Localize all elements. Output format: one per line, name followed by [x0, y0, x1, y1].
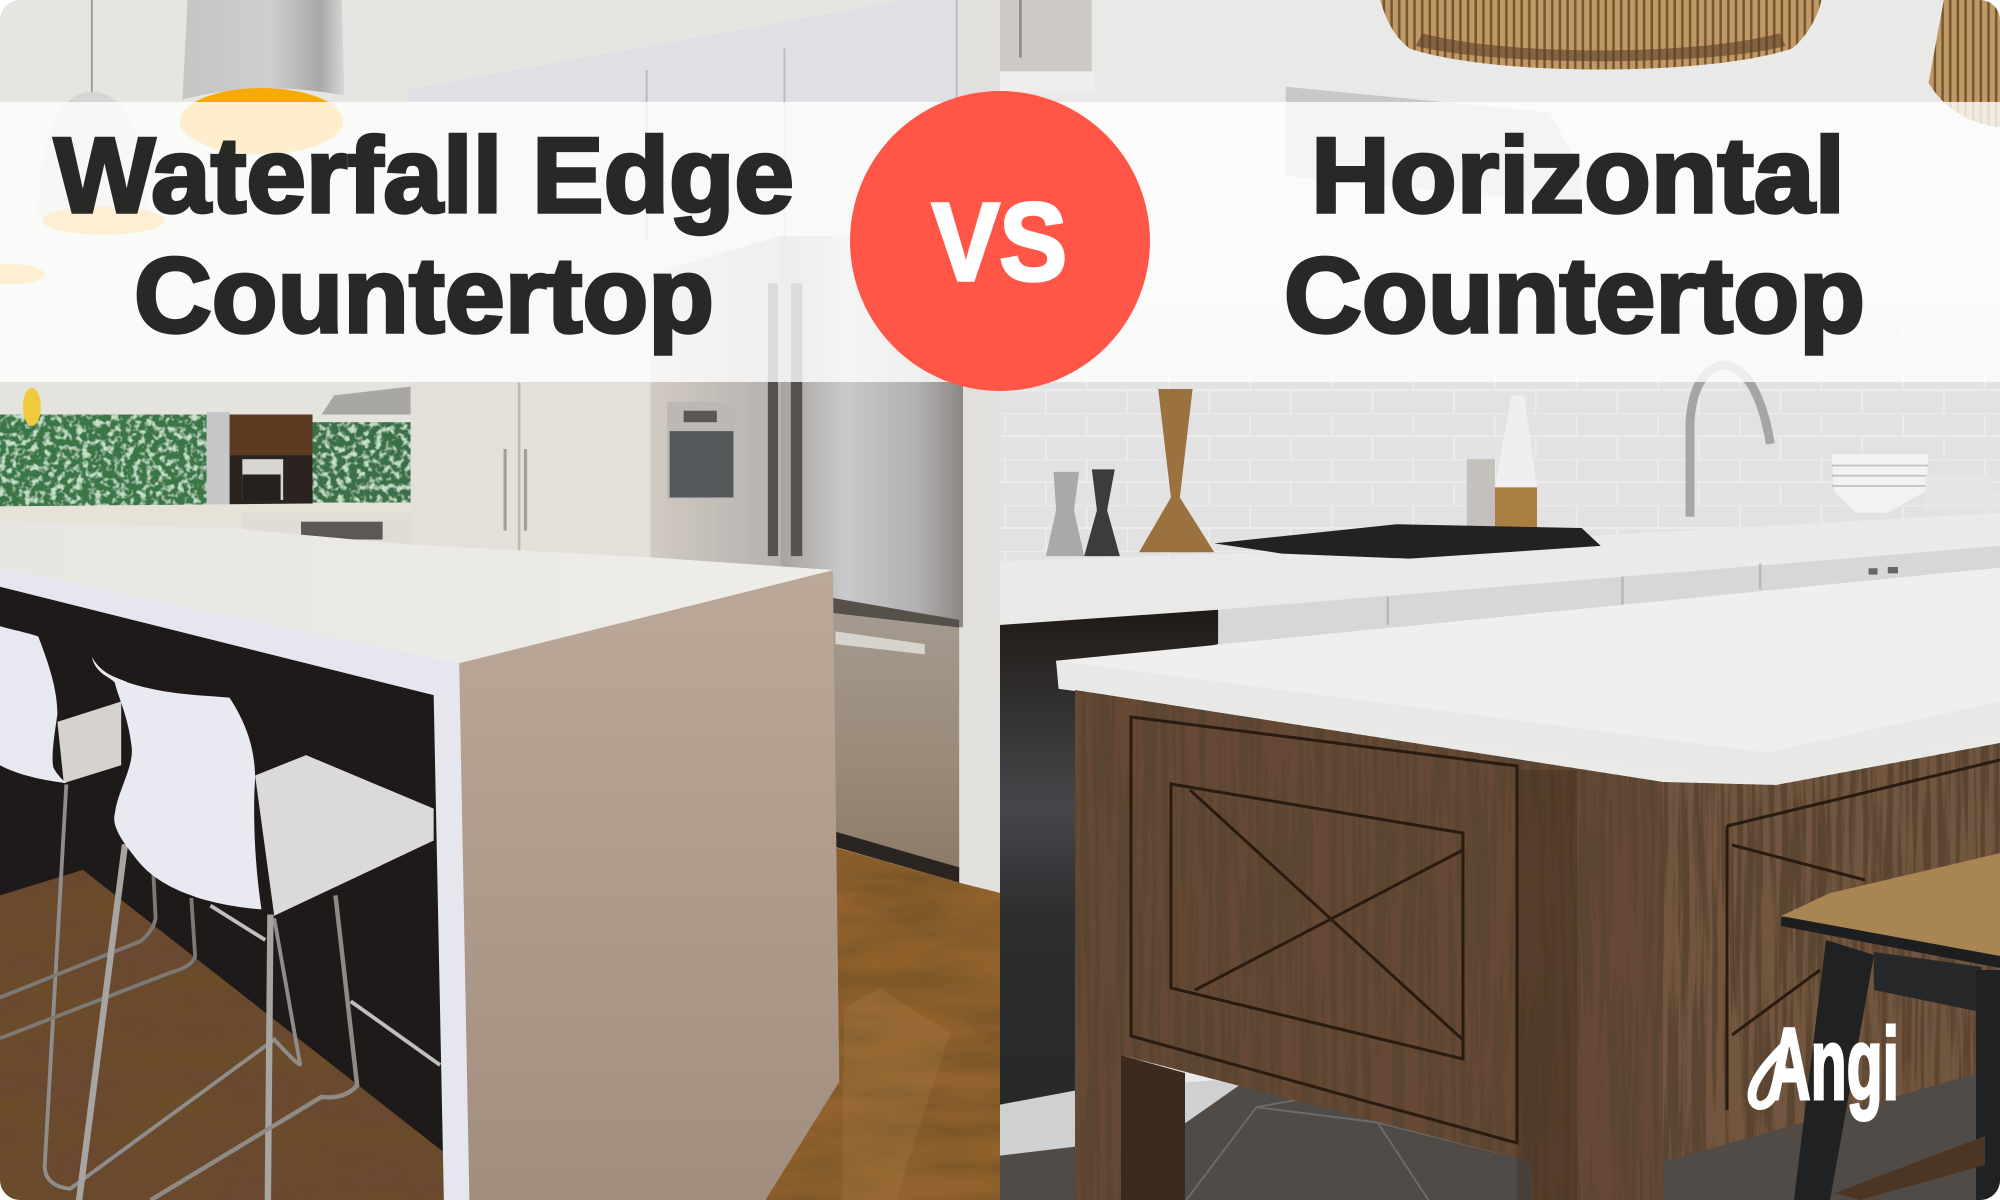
cabinet knobs — [1869, 570, 1898, 571]
faucet — [1690, 365, 1770, 517]
heading: Horizontal Countertop — [1284, 115, 1865, 355]
center leg shading — [1517, 770, 1577, 1200]
title band — [0, 102, 2000, 382]
pale skirting — [1000, 1078, 1250, 1156]
bar stools: back chair — [0, 626, 300, 1189]
stacked bowls — [1832, 454, 1928, 512]
right wood face — [1663, 743, 2000, 1162]
floor — [753, 842, 1000, 1200]
heading: Waterfall Edge Countertop — [54, 115, 794, 355]
back wall below band — [0, 376, 411, 421]
floor — [1000, 1074, 2000, 1200]
island countertop — [1056, 568, 2000, 691]
backsplash tile — [1000, 306, 2000, 568]
refrigerator — [651, 236, 963, 628]
bar stools: front chair — [79, 657, 440, 1200]
heading: Waterfall Edge Countertop: Countertop — [134, 235, 714, 355]
bar stool — [1781, 853, 2000, 1200]
VS badge — [850, 91, 1150, 391]
lower cabinets — [1218, 546, 2000, 644]
upper cabinets — [408, 0, 1000, 383]
open shelf — [1000, 0, 1092, 72]
logo: Angi: Angi — [1768, 1007, 1899, 1121]
white front edge — [0, 568, 472, 1200]
heading: Horizontal Countertop: Countertop — [1284, 235, 1865, 355]
panel: waterfall edge kitchen photo — [0, 0, 1000, 1200]
wooden utensil holder — [1139, 389, 1214, 552]
rear countertop — [1000, 513, 2000, 568]
heading: Horizontal Countertop: Horizontal — [1311, 115, 1845, 235]
rear counter — [0, 503, 411, 529]
pendant lamp: woven right — [1929, 0, 2000, 128]
panel mouldings — [1131, 717, 2000, 1143]
heading: Waterfall Edge Countertop: Waterfall Edge — [54, 115, 794, 235]
range hood — [1286, 86, 1442, 102]
tall cabinets — [411, 383, 651, 561]
island wood base — [1075, 690, 2000, 1200]
pendant lamp: large — [180, 0, 344, 154]
panel: horizontal kitchen photo — [1000, 0, 2000, 1200]
left wood face — [1075, 690, 1663, 1200]
glass bottles — [1467, 395, 1537, 531]
waterfall countertop surface — [0, 520, 835, 596]
right wall column — [959, 0, 1000, 893]
inner leg — [1121, 1055, 1185, 1200]
VS badge: VS — [932, 181, 1067, 304]
waterfall side panel — [459, 570, 839, 1200]
dark appliance — [1000, 610, 1218, 1129]
logo: Angi — [1752, 1007, 1899, 1121]
dark bar base — [0, 580, 446, 1154]
yellow decor — [23, 388, 41, 426]
salt and pepper mills — [1046, 469, 1120, 556]
pendant lamp: small — [0, 0, 165, 284]
fridge drawer — [827, 597, 959, 883]
pendant lamp: woven large — [1380, 0, 1821, 70]
window with greenery — [0, 412, 411, 508]
gas cooktop — [1214, 524, 1601, 559]
